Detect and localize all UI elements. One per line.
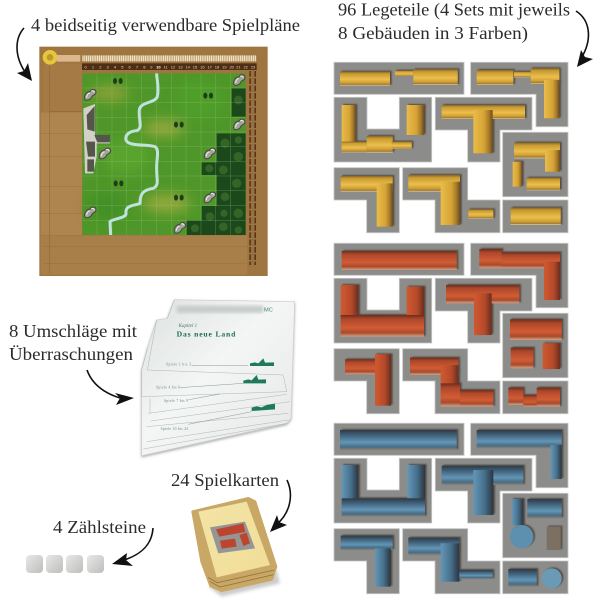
green skylines [243,358,275,411]
wood panels [41,63,247,275]
arrow: to envelopes [87,370,134,405]
envelope header image [177,306,263,313]
rocks [85,75,245,233]
chapter label: Kapitel 1 [178,324,197,329]
heading: envelopes: 8 Umschläge mit [9,321,137,341]
logo: MC [264,308,273,314]
green map field [82,73,246,235]
envelope labels [156,363,191,431]
deck body [193,498,276,591]
envelope labels: Spiele 10 bis 24 [161,427,188,431]
heading: tiles: 8 Gebäuden in 3 Farben) [338,23,528,44]
heading: tiles: 96 Legeteile (4 Sets mit jeweils [338,0,570,20]
arrow: to tiles [576,11,593,67]
heading: game boards: 4 beidseitig verwendbare Spielpläne [31,15,300,35]
grey tile bases [334,243,568,414]
number track top: 20 [229,64,235,69]
counter cubes [26,555,104,573]
arrow: to game board [17,28,32,81]
number track top: 16 [200,64,205,69]
number track top: 19 [222,64,227,69]
number track top: 22 [243,64,249,69]
number track top: 2 [99,64,102,69]
red tile set [334,243,568,414]
number track top: 14 [185,64,191,69]
envelope edges [142,300,290,449]
grey tile bases [334,423,568,594]
heading: tiles [338,0,570,44]
blue buildings [340,430,562,588]
number track top: 12 [171,64,176,69]
number track top: 6 [129,64,132,69]
envelopes stack [142,300,295,456]
dotted score track [82,49,257,67]
number track top: 4 [114,64,117,69]
envelope labels: Spiele 7 bis 9 [164,399,188,403]
coin emblem [43,50,57,65]
number track top: 23 [251,64,256,69]
number track top: 1 [92,64,95,69]
arrow: to counters [112,528,153,566]
red buildings [216,523,250,549]
number track top: 11 [164,64,169,69]
forest [187,88,246,235]
label rules [180,366,252,424]
score bar [57,55,80,62]
river [110,73,158,235]
number track top: 10 [156,64,161,69]
blue tile set [334,423,568,594]
heading: cards: 24 Spielkarten [171,470,279,490]
grass patches [87,80,223,220]
number track top: 21 [236,64,241,69]
tree markers [113,78,213,201]
number track top: 7 [136,64,139,69]
grey tile bases [334,62,568,233]
mountains [83,104,110,173]
number track top: 5 [121,64,124,69]
number track top: 0 [85,64,88,69]
grey tile image [210,522,255,553]
envelope paper stack [142,300,295,456]
number track top [82,63,257,70]
red buildings [341,249,562,407]
number track top: 8 [143,64,146,69]
card edges [208,570,274,587]
deck shadow [208,570,280,597]
number track top: 17 [207,64,213,69]
card deck [193,498,280,597]
heading: counters: 4 Zählsteine [53,517,146,537]
number track top: 9 [150,64,153,69]
board wood frame [39,47,268,276]
grid lines [82,73,246,235]
yellow buildings [340,68,561,227]
heading: envelopes: Überraschungen [9,344,133,364]
number track top: 13 [178,64,183,69]
number track top: 15 [193,64,198,69]
number track top: 3 [107,64,110,69]
yellow tile set [334,62,568,233]
arrow: to cards [270,480,290,532]
chapter title: Das neue Land [177,329,236,338]
number track top: 18 [215,64,220,69]
heading: envelopes [9,321,137,364]
envelope labels: Spiele 1 bis 3 [166,363,191,367]
game board [39,47,268,276]
envelope labels: Spiele 4 bis 6 [156,386,180,390]
number track right [243,71,263,265]
card face [198,502,270,577]
